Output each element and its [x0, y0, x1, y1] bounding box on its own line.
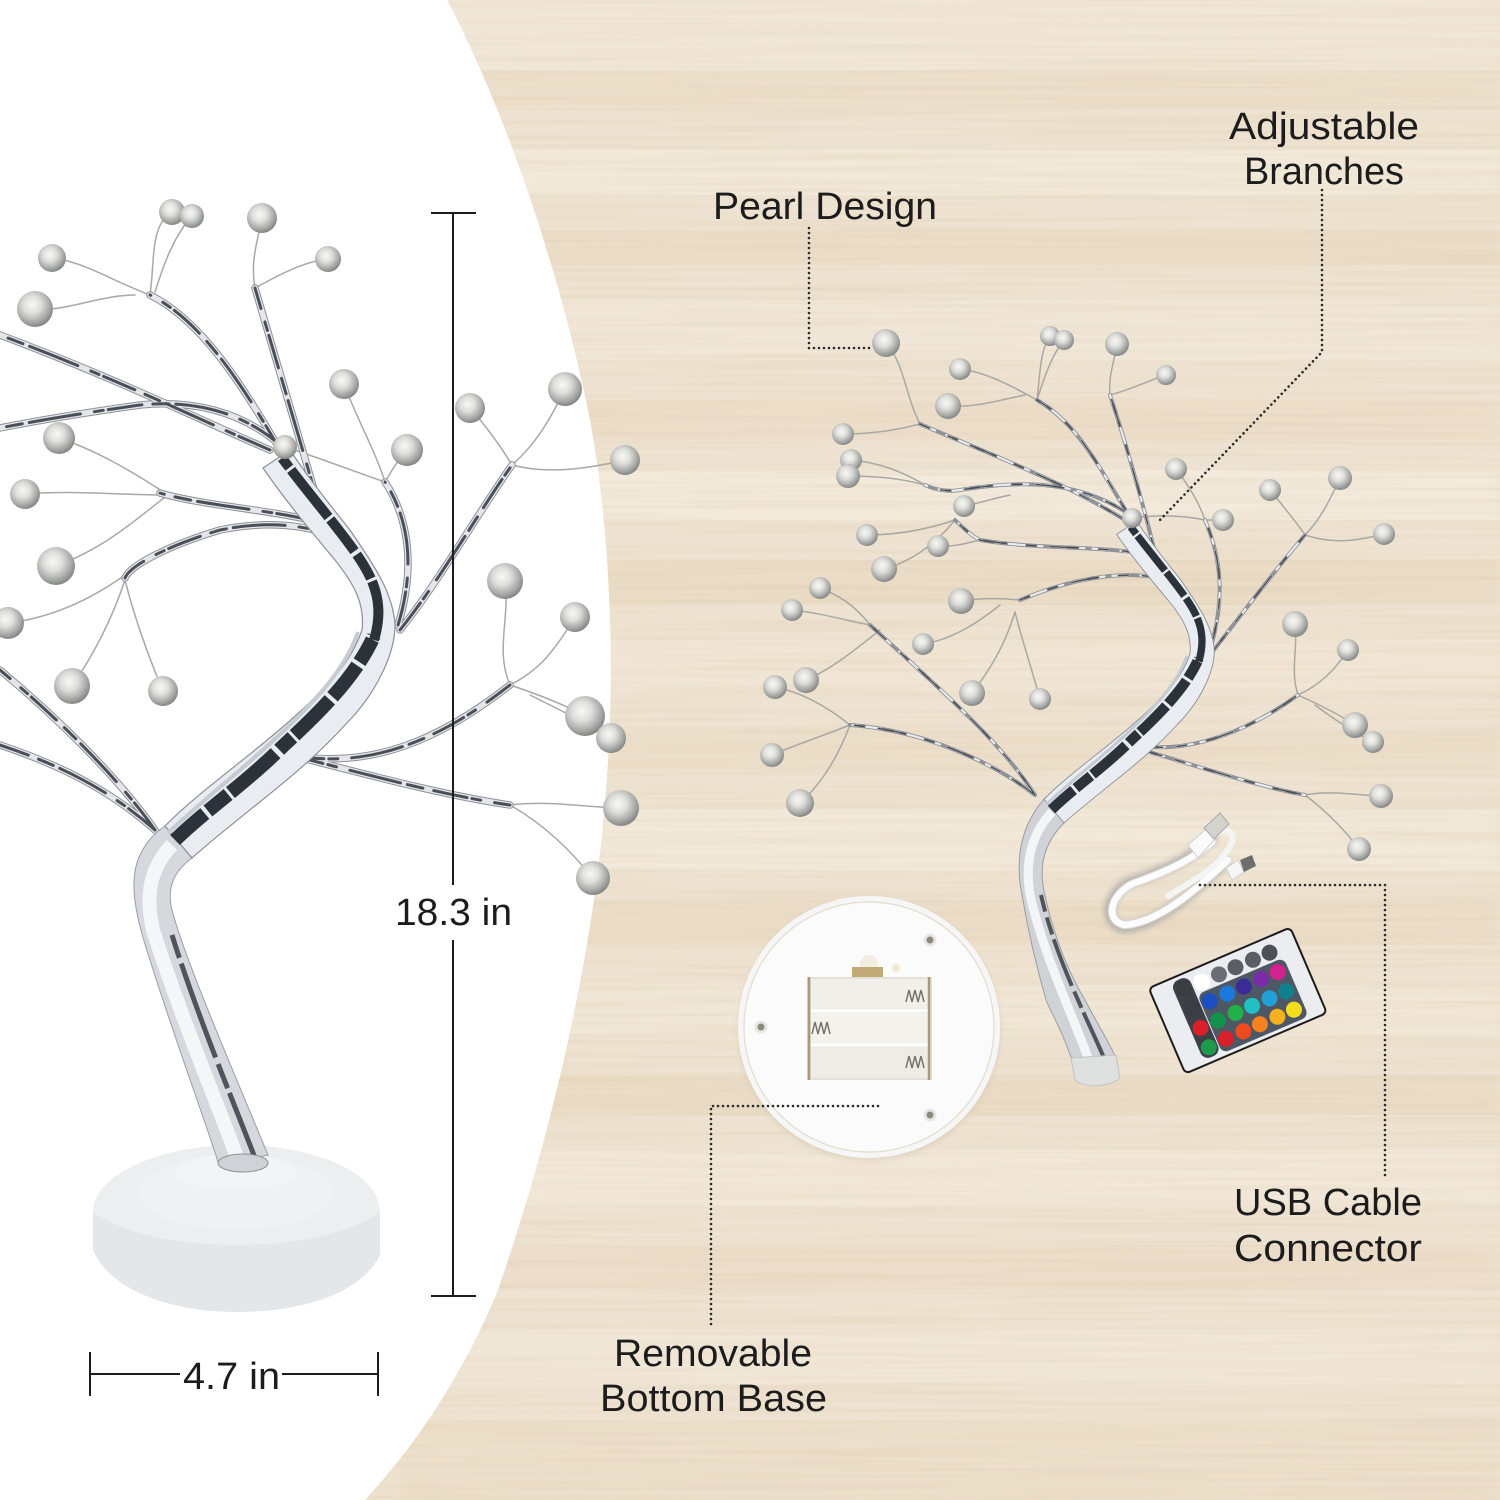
- removable base underside with battery compartment: [738, 896, 1000, 1161]
- callout: USB Cable Connector: [1200, 885, 1422, 1270]
- left tree pearls: [0, 199, 640, 895]
- right tree silver branches: [850, 395, 1305, 795]
- right tree upper trunk: [1044, 521, 1214, 823]
- dimension: width 4.7 in: 4.7 in: [183, 1356, 280, 1398]
- right tree: lamp disassembled: [760, 326, 1395, 1086]
- USB cable: [1109, 813, 1256, 928]
- IR sensor: [852, 955, 900, 977]
- left tree upper trunk: [165, 450, 395, 858]
- right tree twigs: [772, 336, 1384, 849]
- remote button panel: [1197, 958, 1309, 1053]
- left tree: pearl lamp enlarged view: [0, 199, 640, 1172]
- white lamp base: [93, 1145, 380, 1312]
- right tree connector plug: [1071, 1055, 1120, 1086]
- callout: Adjustable Branches: Adjustable: [1229, 106, 1419, 148]
- callout: Removable Bottom Base: Removable: [614, 1333, 812, 1375]
- white curved panel: [0, 0, 611, 1500]
- callout: Pearl Design: Pearl Design: [713, 186, 937, 228]
- remote control buttons: [1171, 939, 1306, 1060]
- screws: [756, 935, 935, 1120]
- callout: Pearl Design: [713, 186, 937, 348]
- callout: USB Cable Connector: USB Cable: [1234, 1182, 1422, 1224]
- callout: USB Cable Connector: Connector: [1234, 1228, 1422, 1270]
- callout: Adjustable Branches: [1158, 106, 1419, 522]
- IR remote control: [1149, 927, 1327, 1074]
- callout: Removable Bottom Base: [600, 1106, 878, 1420]
- dimension: height 18.3 in: 18.3 in: [395, 892, 512, 934]
- dimension: height 18.3 in: [395, 213, 512, 1296]
- right tree pearls: [760, 326, 1395, 861]
- battery compartment: [807, 977, 932, 1080]
- left tree lower trunk: [134, 824, 268, 1172]
- right tree lower trunk: [1019, 797, 1116, 1060]
- callout: Removable Bottom Base: Bottom Base: [600, 1378, 827, 1420]
- dimension: width 4.7 in: [90, 1352, 378, 1398]
- left tree silver branches: [0, 288, 512, 830]
- left tree twigs: [8, 212, 625, 878]
- callout: Adjustable Branches: Branches: [1244, 151, 1404, 193]
